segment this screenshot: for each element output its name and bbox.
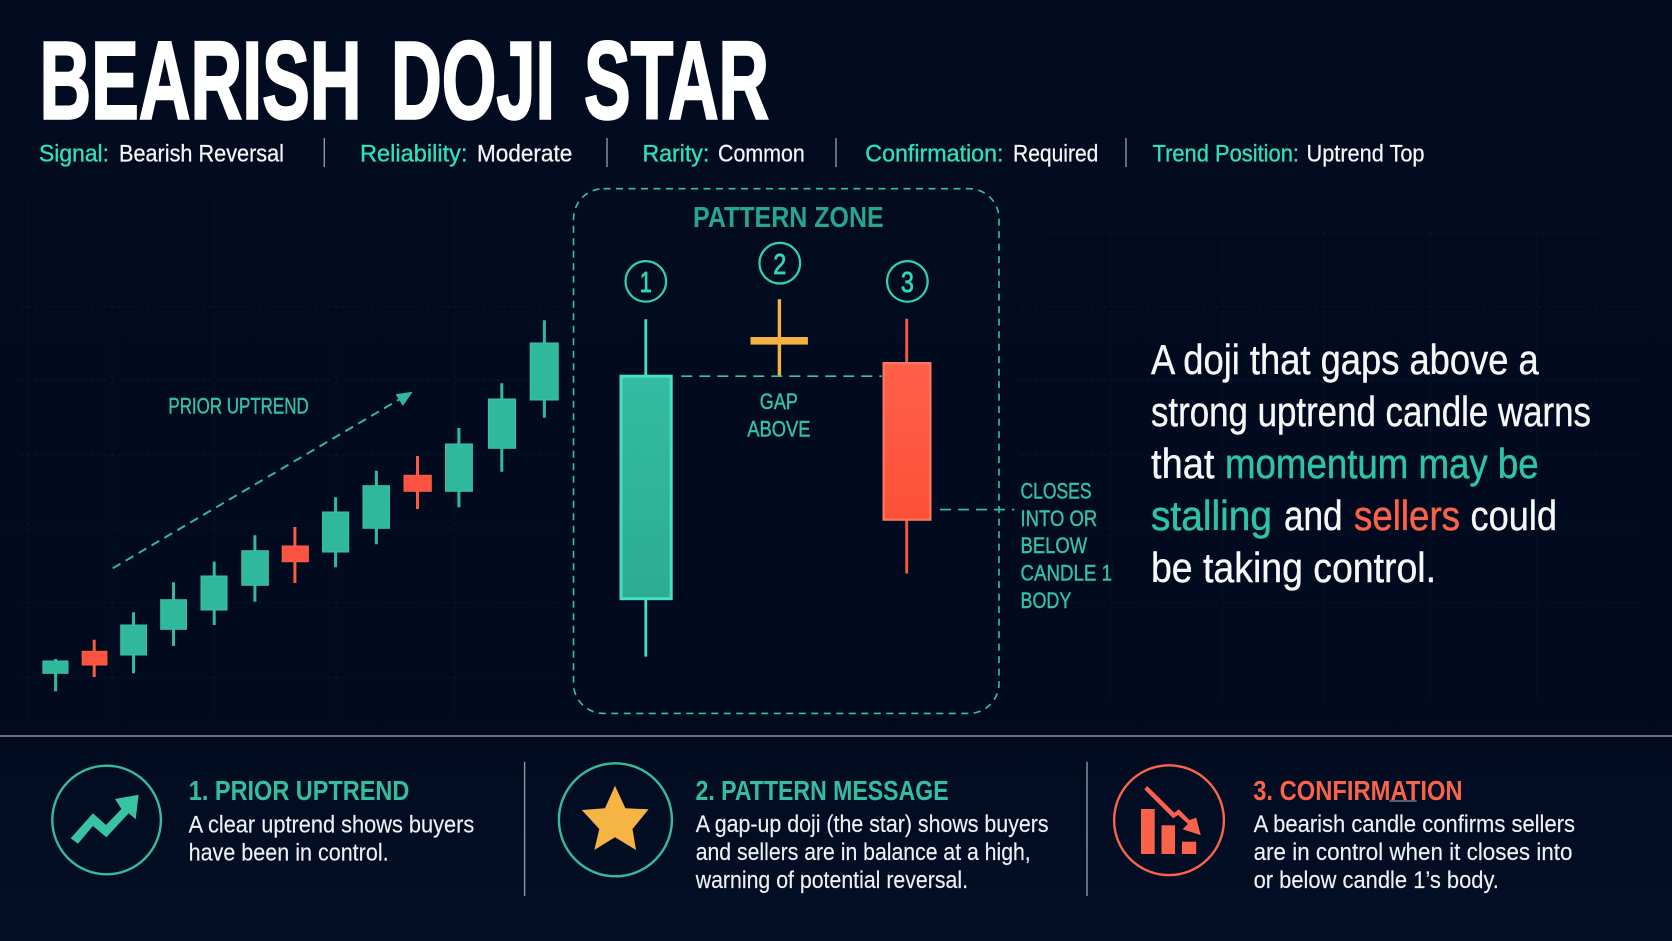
candle 1: 1	[640, 267, 652, 299]
text block: summary: be taking control.	[1151, 544, 1436, 591]
attribute bar: Confirmation:	[865, 140, 1004, 168]
label: closes into or below candle 1 body	[1020, 479, 1112, 613]
panel: pattern message summary	[559, 763, 1049, 894]
attribute bar: Required	[1013, 140, 1098, 168]
title	[40, 20, 769, 142]
attribute bar: Rarity:	[642, 140, 709, 168]
candle 3	[884, 261, 930, 574]
gap guide line	[681, 375, 882, 377]
panel: prior uptrend summary	[52, 766, 474, 874]
close guide line	[940, 509, 1014, 511]
text block: summary: that	[1151, 440, 1215, 487]
attribute bar: Moderate	[477, 140, 572, 168]
attribute bar: Signal:	[39, 140, 109, 168]
attribute bar: Bearish Reversal	[119, 140, 284, 168]
label: closes into or below candle 1 body: CLOSES	[1020, 479, 1092, 504]
text block: summary: sellers	[1354, 492, 1460, 539]
candle 2: doji	[750, 243, 808, 376]
description: confirmation: are in control when it closes into	[1254, 839, 1572, 866]
panel: pattern zone	[574, 189, 999, 713]
heading: pattern zone: PATTERN ZONE	[693, 202, 884, 234]
label: gap above: ABOVE	[747, 416, 810, 441]
description: prior uptrend: have been in control.	[189, 840, 389, 866]
description: prior uptrend: A clear uptrend shows buyers	[189, 812, 474, 838]
text block: summary: A doji that gaps above a	[1151, 336, 1539, 383]
arrow: prior uptrend	[113, 392, 413, 568]
chart: prior uptrend candles	[43, 320, 558, 691]
attribute bar: Common	[718, 140, 805, 168]
attribute bar	[39, 138, 1424, 168]
text block: summary: could	[1470, 492, 1557, 539]
label: gap above: GAP	[760, 389, 798, 414]
attribute bar: Uptrend Top	[1306, 140, 1424, 168]
icon: star	[559, 763, 672, 876]
label: prior uptrend: PRIOR UPTREND	[168, 393, 309, 418]
text block: summary: stalling	[1151, 492, 1272, 539]
heading: confirmation: 3. CONFIRMATION	[1253, 775, 1463, 806]
description: confirmation: or below candle 1’s body.	[1254, 867, 1499, 894]
label: closes into or below candle 1 body: INTO OR	[1020, 506, 1097, 531]
panel: confirmation summary	[1114, 765, 1575, 894]
heading: prior uptrend: 1. PRIOR UPTREND	[189, 775, 409, 806]
icon: falling bars and arrow	[1114, 765, 1224, 875]
description: confirmation: A bearish candle confirms sellers	[1254, 811, 1575, 838]
description: pattern message	[695, 811, 1049, 894]
attribute bar: Reliability:	[360, 140, 468, 168]
description: pattern message: A gap-up doji (the star) shows buyers	[696, 811, 1049, 838]
label: gap above	[747, 389, 810, 441]
candle 3: 3	[901, 267, 914, 299]
text block: summary: and	[1284, 492, 1342, 539]
title: STAR	[584, 20, 769, 142]
icon: rising arrow	[52, 766, 161, 874]
label: closes into or below candle 1 body: CANDLE 1	[1020, 561, 1112, 586]
description: prior uptrend	[189, 812, 474, 866]
attribute bar: Trend Position:	[1152, 140, 1299, 168]
heading: pattern message: 2. PATTERN MESSAGE	[696, 775, 949, 806]
candle 2: doji: 2	[773, 249, 786, 281]
text block: summary	[1151, 336, 1591, 591]
candle 1	[621, 261, 671, 657]
description: pattern message: and sellers are in balance at a high,	[696, 839, 1031, 866]
description: pattern message: warning of potential reversal.	[695, 867, 968, 894]
description: confirmation	[1254, 811, 1575, 894]
text block: summary: strong uptrend candle warns	[1151, 388, 1591, 435]
title: BEARISH	[40, 20, 362, 142]
label: closes into or below candle 1 body: BELOW	[1020, 533, 1088, 558]
text block: summary: momentum may be	[1225, 440, 1539, 487]
label: closes into or below candle 1 body: BODY	[1020, 588, 1071, 613]
title: DOJI	[391, 20, 555, 142]
